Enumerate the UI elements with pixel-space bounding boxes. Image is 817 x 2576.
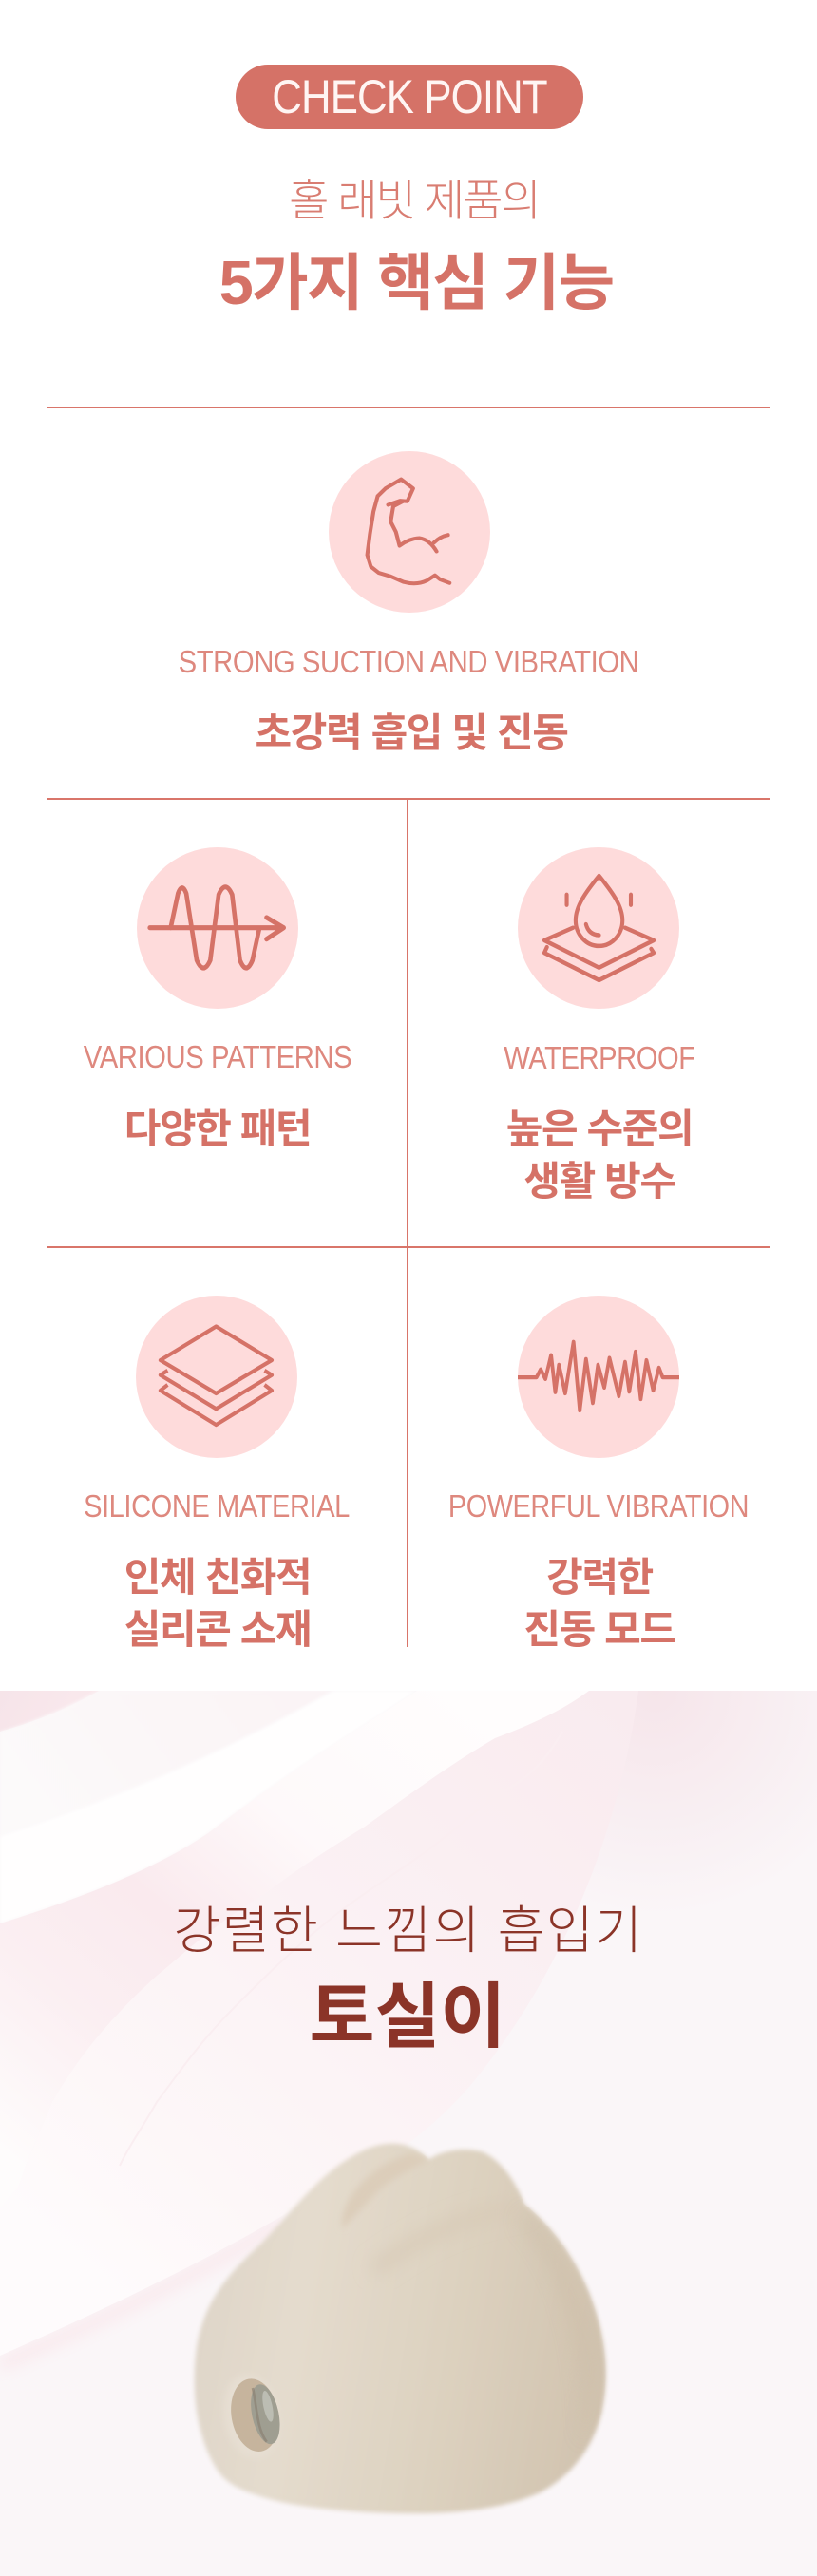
label: korean: 생활 방수 xyxy=(523,1149,675,1207)
heading: subtitle: 홀 래빗 제품의 xyxy=(289,166,540,229)
label: korean: 초강력 흡입 및 진동 xyxy=(255,701,568,759)
icon: flexed arm xyxy=(329,451,490,613)
label: korean: 진동 모드 xyxy=(523,1598,675,1656)
feature: strong suction and vibration xyxy=(179,451,638,759)
badge: CHECK POINT xyxy=(236,65,583,129)
label: english: POWERFUL VIBRATION xyxy=(448,1488,749,1524)
panel: product hero xyxy=(0,1691,817,2576)
label: korean xyxy=(506,1097,693,1207)
label: korean: 인체 친화적 xyxy=(124,1545,311,1603)
background: sheer fabric xyxy=(0,1691,775,2008)
illustration: rabbit product xyxy=(192,2141,608,2515)
heading: tagline: 강렬한 느낌의 흡입기 xyxy=(174,1888,643,1963)
label: english: VARIOUS PATTERNS xyxy=(84,1039,352,1074)
label: korean: 실리콘 소재 xyxy=(124,1598,311,1656)
icon: waveform xyxy=(518,1296,679,1458)
badge label: CHECK POINT xyxy=(272,70,547,123)
feature: waterproof xyxy=(504,847,695,1207)
icon: stacked sheets xyxy=(136,1296,297,1458)
label: korean xyxy=(124,1545,311,1656)
icon: wave arrow xyxy=(137,847,298,1009)
feature: various patterns xyxy=(84,847,352,1155)
shading under the right ear xyxy=(373,2207,524,2270)
label: korean: 다양한 패턴 xyxy=(124,1097,311,1155)
feature: powerful vibration xyxy=(448,1296,749,1656)
icon: water drop on layers xyxy=(518,847,679,1009)
ear crease xyxy=(342,2156,426,2225)
label: korean xyxy=(523,1545,675,1656)
label: english: WATERPROOF xyxy=(504,1040,695,1075)
label: korean: 높은 수준의 xyxy=(506,1097,693,1155)
label: english: STRONG SUCTION AND VIBRATION xyxy=(179,644,638,679)
label: english: SILICONE MATERIAL xyxy=(84,1488,350,1524)
heading: product name: 토실이 xyxy=(309,1959,505,2062)
suction hole xyxy=(217,2370,287,2463)
feature: silicone material xyxy=(84,1296,350,1656)
label: korean: 강력한 xyxy=(546,1545,653,1603)
heading: main title: 5가지 핵심 기능 xyxy=(219,248,613,317)
